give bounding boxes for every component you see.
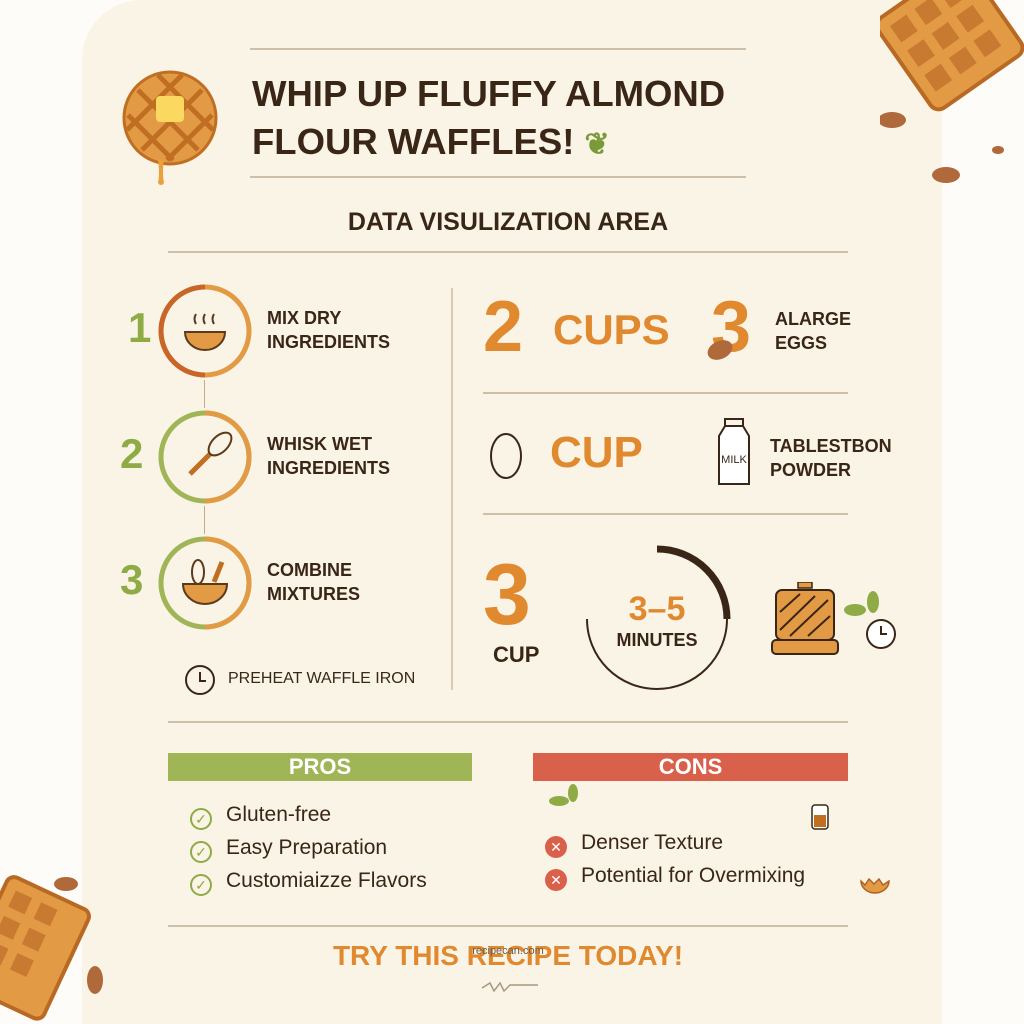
step 3: 3: [120, 556, 143, 603]
step 1: 1: [128, 304, 151, 351]
panel: pros: [168, 753, 472, 896]
preheat note: PREHEAT WAFFLE IRON: [228, 670, 415, 687]
title: [252, 73, 725, 162]
timer arc: [586, 546, 730, 690]
step 3: [120, 536, 360, 630]
panel: cons: [533, 753, 890, 894]
panel: pros: ✓: [195, 877, 207, 893]
stat: cup / milk powder: TABLESTBON: [770, 436, 892, 456]
decorative waffles top right: [880, 0, 1024, 183]
step 3: COMBINE: [267, 560, 352, 580]
title: FLOUR WAFFLES! ❦: [252, 121, 610, 162]
stat: 2 cups, 3 eggs: EGGS: [775, 333, 827, 353]
step 2: 2: [120, 430, 143, 477]
step 3: MIXTURES: [267, 584, 360, 604]
stat: 2 cups, 3 eggs: 2: [483, 287, 523, 367]
step 2: WHISK WET: [267, 434, 372, 454]
icon: waffle iron: [771, 582, 839, 655]
panel: cons: Denser Texture: [581, 831, 723, 854]
step 2: [120, 410, 390, 504]
preheat note: [185, 665, 415, 695]
stat: 3 cup + timer: 3–5: [629, 590, 685, 628]
panel: cons: Potential for Overmixing: [581, 864, 805, 887]
stat: cup / milk powder: MILK: [721, 454, 747, 466]
stat: cup / milk powder: CUP: [550, 428, 643, 477]
stat: 2 cups, 3 eggs: ALARGE: [775, 309, 851, 329]
panel: cons: ✕: [550, 839, 562, 855]
section heading: DATA VISULIZATION AREA: [348, 208, 668, 236]
footer call to action: TRY THIS RECIPE TODAY!: [333, 940, 683, 971]
stat: 2 cups, 3 eggs: 3: [711, 287, 751, 367]
panel: cons: ✕: [550, 872, 562, 888]
stat: 3 cup + timer: CUP: [493, 642, 539, 667]
title: WHIP UP FLUFFY ALMOND: [252, 73, 725, 114]
panel: pros: ✓: [195, 811, 207, 827]
panel: pros: Customiaizze Flavors: [226, 869, 427, 892]
decorative waffle bottom left: [0, 875, 103, 1021]
stat: 2 cups, 3 eggs: [483, 287, 851, 367]
icon: waffle with butter: [122, 70, 218, 185]
panel: pros: PROS: [289, 754, 351, 779]
steps panel: [120, 284, 415, 695]
stat: 3 cup + timer: [483, 546, 896, 690]
panel: cons: CONS: [659, 754, 722, 779]
step 2: INGREDIENTS: [267, 458, 390, 478]
step 1: MIX DRY: [267, 308, 341, 328]
icon: sprout clock: [844, 591, 896, 649]
stat: 2 cups, 3 eggs: CUPS: [553, 306, 670, 353]
stat: cup / milk powder: POWDER: [770, 460, 851, 480]
stat: 3 cup + timer: 3: [483, 547, 531, 643]
watermark: recipecan.com: [472, 945, 544, 957]
step 1: INGREDIENTS: [267, 332, 390, 352]
panel: pros: Easy Preparation: [226, 836, 387, 859]
panel: pros: Gluten-free: [226, 803, 331, 826]
stat: 3 cup + timer: MINUTES: [616, 630, 698, 650]
panel: pros: ✓: [195, 844, 207, 860]
step 1: [128, 284, 390, 378]
stat: cup / milk powder: [490, 418, 892, 485]
